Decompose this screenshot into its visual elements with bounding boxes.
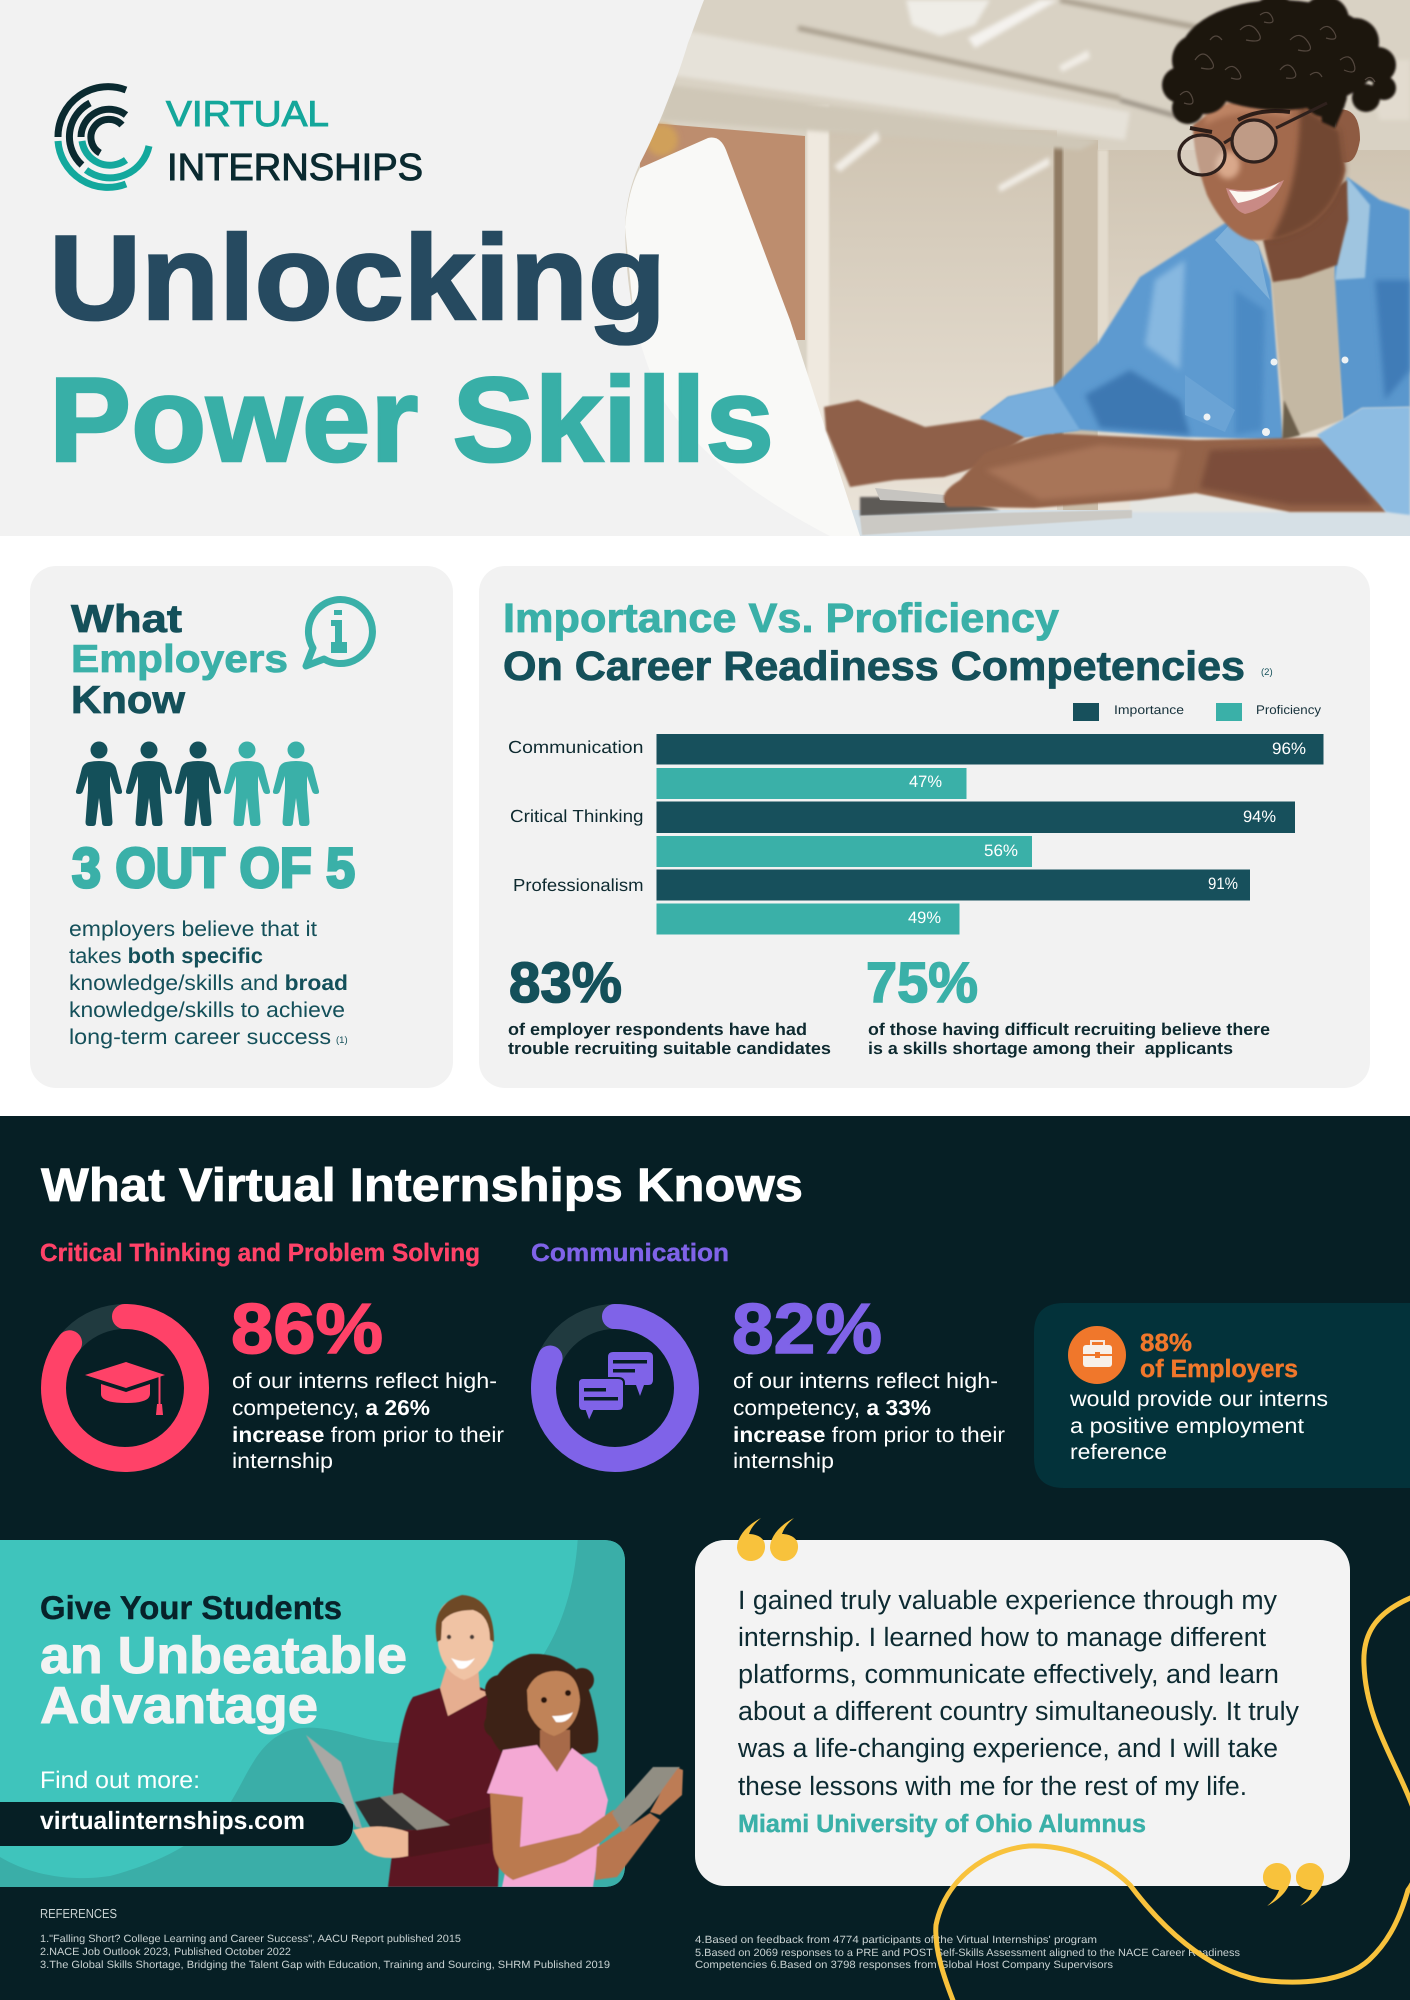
denim shirt [980, 220, 1283, 440]
bar chart: 96% [1272, 740, 1306, 758]
stat block: communication [531, 1239, 1005, 1473]
heading: Know [71, 679, 186, 722]
icon: briefcase [1068, 1326, 1126, 1384]
icon: graduation cap [85, 1362, 165, 1415]
stat: 75% [866, 951, 1270, 1058]
icon: opening quote [737, 1518, 798, 1561]
body text: long-term career success [69, 1025, 331, 1049]
laptop lid [625, 138, 860, 536]
body text: takes both specific [69, 944, 263, 968]
footnote marker: (2) [1261, 667, 1273, 678]
bar chart: Communication [508, 737, 644, 757]
female student hair [484, 1654, 598, 1763]
icon: five people [76, 742, 319, 826]
stat: 75%: of those having difficult recruiting believe there [868, 1020, 1270, 1039]
bar chart: Critical Thinking [510, 806, 644, 826]
glasses [1179, 103, 1327, 175]
find out more: Find out more: [40, 1767, 200, 1794]
legend: Proficiency [1256, 703, 1322, 717]
callout: 88% of employers: of Employers [1140, 1355, 1298, 1383]
link pill: virtualinternships.com [40, 1807, 305, 1835]
panel: call to action: Advantage [40, 1677, 318, 1735]
stat block: critical thinking [40, 1239, 504, 1473]
logo wordmark [166, 93, 423, 189]
references: Competencies 6.Based on 3798 responses from Global Host Company Supervisors [695, 1959, 1113, 1971]
heading: On Career Readiness Competencies [503, 643, 1245, 689]
description: internship [733, 1449, 834, 1473]
description: of our interns reflect high- [733, 1369, 998, 1393]
face [1193, 96, 1345, 240]
bar chart: 47% [909, 773, 942, 791]
icon: info bubble [306, 600, 372, 666]
ear [1335, 109, 1360, 162]
description: internship [232, 1449, 333, 1473]
quote text: internship. I learned how to manage different [738, 1622, 1267, 1652]
t-shirt [1271, 262, 1343, 438]
references: 4.Based on feedback from 4774 participants of the Virtual Internships' program [695, 1934, 1097, 1946]
decorative yellow line [936, 1596, 1410, 2000]
references: 5.Based on 2069 responses to a PRE and POST Self-Skills Assessment aligned to the NACE Career Readiness [695, 1947, 1240, 1959]
collars [1215, 222, 1270, 300]
eyebrows [1190, 111, 1290, 132]
bar chart: Professionalism [513, 875, 644, 895]
quote text: platforms, communicate effectively, and learn [738, 1659, 1279, 1689]
ceiling beams [660, 0, 1410, 192]
hero photo: student at laptop [600, 0, 1410, 536]
stat: 3 out of 5: 3 OUT OF 5 [72, 836, 355, 899]
heading: Importance Vs. Proficiency [503, 595, 1059, 641]
logo wordmark: VIRTUAL [166, 93, 329, 134]
quote text [737, 1585, 1300, 1801]
callout: 88% of employers: reference [1070, 1440, 1167, 1464]
female student neck and face [540, 1730, 570, 1772]
logo [58, 87, 149, 187]
quote text: these lessons with me for the rest of my life. [738, 1771, 1247, 1801]
stat: 75%: 75% [866, 951, 978, 1015]
title: Power Skills [49, 353, 774, 487]
panel: what employers know [30, 566, 453, 1088]
panel: testimonial [695, 1540, 1350, 1886]
bar chart: 91% [1208, 875, 1238, 893]
dark section background [0, 1116, 1410, 2000]
legend [1073, 703, 1322, 721]
attribution: Miami University of Ohio Alumnus [738, 1810, 1146, 1838]
male student head [438, 1598, 493, 1680]
hair [1162, 0, 1396, 128]
ring chart 86% [54, 1316, 196, 1460]
description [232, 1369, 504, 1473]
description: competency, a 26% [232, 1396, 430, 1420]
laptop [306, 1735, 362, 1828]
bar chart [508, 734, 1324, 934]
callout: 88% of employers [1034, 1303, 1410, 1488]
callout: 88% of employers: a positive employment [1070, 1414, 1304, 1438]
table [840, 510, 1410, 536]
callout: 88% of employers: 88% [1140, 1329, 1192, 1357]
left hand [824, 400, 1025, 487]
panel: importance vs proficiency [479, 566, 1370, 1088]
heading text: Give Your Students [40, 1589, 342, 1626]
stat: 83% [508, 951, 831, 1058]
heading [503, 595, 1245, 689]
references: 2.NACE Job Outlook 2023, Published October 2022 [40, 1946, 291, 1958]
description: competency, a 33% [733, 1396, 931, 1420]
male student sweater [388, 1680, 505, 1887]
icon: chat bubbles [578, 1352, 653, 1422]
right hand and forearm [944, 433, 1386, 512]
hero light panel [0, 0, 830, 536]
heading [71, 598, 288, 722]
stat: 75%: is a skills shortage among their applicants [868, 1039, 1233, 1058]
stat: 83%: 83% [509, 951, 622, 1015]
title: Unlocking [49, 211, 666, 345]
female student arms [490, 1793, 632, 1880]
heading: What [71, 598, 182, 641]
stat: 83%: trouble recruiting suitable candidates [508, 1039, 831, 1058]
icon: closing quote [1263, 1863, 1324, 1906]
body text: employers believe that it [69, 917, 317, 941]
callout: 88% of employers: would provide our interns [1069, 1387, 1328, 1411]
bar chart: 56% [984, 842, 1018, 860]
link pill [0, 1802, 353, 1846]
logo wordmark: INTERNSHIPS [167, 147, 423, 189]
body text [69, 917, 348, 1049]
ring chart 82% [544, 1316, 686, 1460]
background blob [0, 1535, 630, 1890]
references: REFERENCES [40, 1906, 117, 1921]
references: 1."Falling Short? College Learning and Career Success", AACU Report published 2015 [40, 1933, 461, 1945]
shirt shading [1085, 260, 1410, 435]
quote text: was a life-changing experience, and I will take [737, 1733, 1278, 1763]
shirt cuff [1317, 407, 1410, 515]
hero section [0, 0, 1410, 536]
heading: what virtual internships knows: What Virtual Internships Knows [41, 1158, 803, 1211]
quote text: about a different country simultaneously. It truly [738, 1696, 1300, 1726]
stat: 83%: of employer respondents have had [508, 1020, 807, 1039]
stat block: communication: Communication [531, 1239, 729, 1267]
references: 3.The Global Skills Shortage, Bridging the Talent Gap with Education, Training and Sourcing, SHRM Published 2019 [40, 1959, 610, 1971]
body text: knowledge/skills and broad [69, 971, 348, 995]
keyboard and laptop base [860, 497, 1000, 516]
stat value: 86% [231, 1290, 383, 1369]
title [49, 211, 774, 487]
body text: (1) [336, 1035, 348, 1046]
description: increase from prior to their [733, 1423, 1005, 1447]
tablet [612, 1767, 680, 1832]
bar chart: 49% [908, 909, 941, 927]
description: increase from prior to their [232, 1423, 504, 1447]
bar chart: 94% [1243, 808, 1276, 826]
panel: call to action: an Unbeatable [40, 1627, 407, 1685]
body text: knowledge/skills to achieve [69, 998, 345, 1022]
neck [1263, 180, 1348, 282]
wall panels and brick [825, 130, 1057, 530]
references [40, 1906, 1240, 1971]
heading: Employers [71, 638, 288, 681]
smile [1226, 180, 1284, 214]
pink shirt [487, 1745, 608, 1887]
photo: two students [306, 1595, 683, 1887]
stat value: 82% [732, 1290, 882, 1369]
stat block: critical thinking: Critical Thinking and Problem Solving [40, 1239, 480, 1267]
description [733, 1369, 1005, 1473]
legend: Importance [1114, 703, 1184, 717]
quote text: I gained truly valuable experience through my [738, 1585, 1278, 1615]
panel: call to action [0, 1535, 683, 1890]
description: of our interns reflect high- [232, 1369, 497, 1393]
